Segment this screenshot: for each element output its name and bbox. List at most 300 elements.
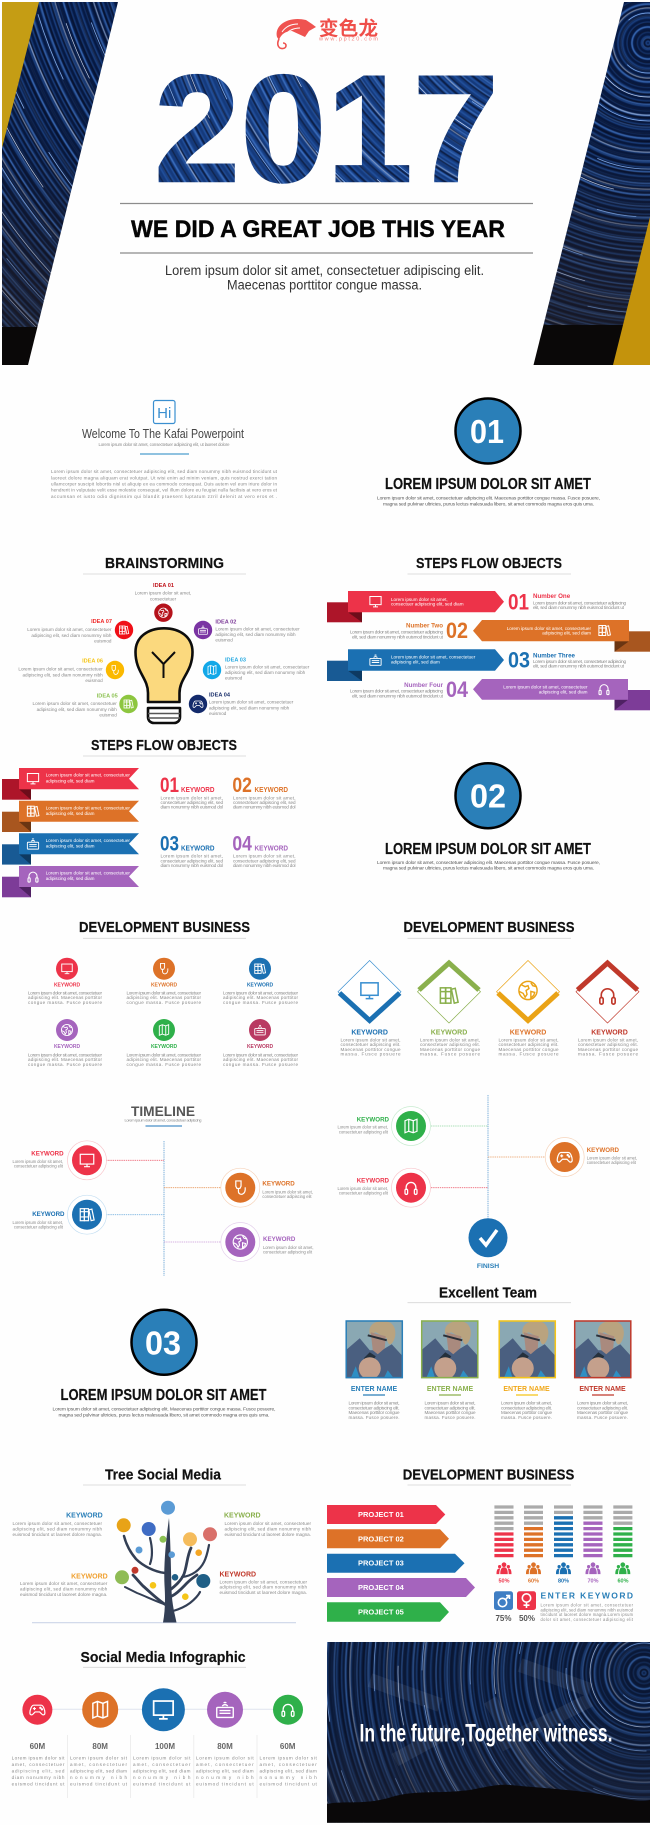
member yellow: ENTER NAME [503,1386,550,1393]
member yellow: consectetuer adipiscing elit. [501,1405,552,1410]
node red [12,1141,164,1180]
diamond green: consectetuer adipiscing elit. [420,1042,480,1047]
column 80M keyboard: euismod tincidunt ut [196,1781,254,1786]
item blue: KEYWORD [247,982,273,988]
step 02: 02 [446,618,468,643]
ribbon blue [2,833,139,865]
left gold corner [2,2,39,148]
bar chart: 80 percent: 80% [558,1578,569,1584]
section 02 description [377,860,600,872]
keyword red [220,1572,307,1595]
diamond amber: KEYWORD [510,1030,546,1037]
ribbon red: adipiscing elit, sed diam [46,778,95,783]
step 03: Lorem ipsum dolor sit amet, consectetuer adipiscing [533,659,626,664]
idea 01: IDEA 01 [153,583,174,589]
step 02: adipiscing elit, sed diam [542,631,591,636]
step 01: elit, sed diam nonummy nibh euismod tincidunt ut [533,605,625,610]
item red: congue massa. Fusce posuere [28,1000,102,1005]
node green: consectetuer adipiscing elit [339,1129,389,1134]
enter keyword block: adipiscing elit, sed diam nonummy nibh euismod [540,1607,634,1612]
keyword 01: KEYWORD [181,787,214,794]
panel: development business (six icons) [28,919,298,1067]
step 03: Lorem ipsum dolor sit amet, consectetuer [391,655,476,660]
node orange [164,1168,313,1207]
column 80M keyboard [196,1692,254,1786]
member blue: massa. Fusce posuere. [348,1415,400,1420]
node green: Lorem ipsum dolor sit amet, [337,1125,388,1130]
node purple [164,1222,314,1262]
item purple: KEYWORD [54,1044,80,1050]
idea 01 [135,583,191,622]
keyword blue: euismod tincidunt ut laoreet dolore magna. [12,1532,102,1537]
big year 2017: 2017 [154,44,499,214]
column 80M keyboard: Lorem ipsum dolor sit [196,1756,254,1761]
idea 02: IDEA 02 [215,619,236,625]
panel: welcome [51,400,278,499]
member yellow [499,1320,556,1420]
idea 02 [194,619,300,643]
item crimson: congue massa. Fusce posuere [223,1062,298,1067]
idea 04: euismod [209,711,227,716]
column 60M headphones [260,1695,318,1786]
node orange: KEYWORD [262,1180,295,1188]
hero subtitle: Lorem ipsum dolor sit amet, consectetuer adipiscing elit. [165,263,484,278]
item red: KEYWORD [54,982,80,988]
item crimson: Lorem ipsum dolor sit amet, consectetuer [223,1052,298,1057]
keyword 04: diam nonummy nibh euismod dol [233,863,296,868]
member red: Lorem ipsum dolor sit amet, [577,1400,628,1405]
item crimson [223,1019,298,1067]
keyword green: Lorem ipsum dolor sit amet, consectetuer [224,1521,311,1526]
bar chart: 60 percent orange: 60% [528,1578,539,1584]
idea 05: euismod [99,713,117,718]
idea 04: adipiscing elit, sed diam nonummy nibh [209,706,290,710]
item red: adipiscing elit. Maecenas porttitor [28,995,102,1000]
column 60M game: euismod tincidunt ut [12,1781,65,1786]
idea 06: IDEA 06 [82,659,103,665]
member yellow: massa. Fusce posuere. [501,1415,552,1420]
project 02: PROJECT 02 [358,1534,404,1543]
node blue: consectetuer adipiscing elit [14,1225,64,1230]
diamond blue: Maecenas porttitor congue [340,1047,401,1052]
column 60M headphones: euismod tincidunt ut [260,1781,318,1786]
section 01 description: magna sed pulvinar ultricies, purus lectus malesuada libero, sit amet commodo magna eros quis urna. [383,501,594,507]
keyword 01 [160,774,223,810]
keyword red: Lorem ipsum dolor sit amet, consectetuer [220,1579,307,1584]
diamond red: consectetuer adipiscing elit. [578,1042,638,1047]
idea 02: adipiscing elit, sed diam nonummy nibh [215,632,296,637]
member blue: Maecenas porttitor congue [348,1410,400,1415]
keyword 01: Lorem ipsum dolor sit amet, [160,795,223,800]
diamond amber [496,960,560,1057]
heading: Tree Social Media [105,1466,222,1483]
diamond blue: Lorem ipsum dolor sit amet, [340,1037,400,1042]
member red: Maecenas porttitor congue [577,1410,628,1415]
section 02 heading: LOREM IPSUM DOLOR SIT AMET [385,841,591,858]
hero subtitle [165,263,484,292]
panel: tree social media [12,1466,311,1623]
item green: Lorem ipsum dolor sit amet, consectetuer [126,1052,201,1057]
ribbon orange [2,801,139,832]
panel: closing star-trail slide [327,1642,650,1823]
enter keyword block: ENTER KEYWORD [540,1590,633,1600]
keyword green: KEYWORD [224,1513,261,1520]
step 03: 03 [508,648,530,673]
section 02 description: Lorem ipsum dolor sit amet, consectetuer adipiscing elit. Maecenas porttitor congue massa. Fusce posuere, [377,860,600,866]
diamond amber: consectetuer adipiscing elit. [498,1042,558,1047]
idea 03: euismod [225,676,243,681]
keyword blue: Lorem ipsum dolor sit amet, consectetuer [12,1521,102,1526]
column 100M monitor: adipiscing elit, sed diam [133,1768,191,1773]
item red [28,958,102,1005]
idea 05 [33,693,138,718]
panel: brainstorming [18,555,310,723]
keyword orange: KEYWORD [71,1573,108,1580]
column 60M game [12,1695,65,1786]
step 01: Lorem ipsum dolor sit amet, [391,597,448,602]
keyword orange: adipiscing elit, sed diam nonummy nibh [20,1586,108,1591]
step 04: elit, sed diam nonummy nibh euismod tincidunt ut [352,693,444,698]
diamond red: Maecenas porttitor congue [578,1047,638,1052]
idea 07: Lorem ipsum dolor sit amet, consectetuer [27,627,112,632]
column 100M monitor [133,1688,191,1786]
welcome heading: Welcome To The Kafai Powerpoint [82,427,244,441]
keyword blue [12,1513,103,1537]
keyword 01: diam nonummy nibh euismod dol [160,805,223,810]
welcome paragraph: ullamcorper suscipit lobortis nisl ut aliquip ex ea commodo consequat. Duis autem vel eum iriure dolor in [51,482,277,486]
bar chart: 80 percent [554,1507,573,1584]
bar chart: 50 percent: 50% [498,1578,510,1584]
panel: steps flow objects (arrows) [327,555,650,710]
hero subtitle: Maecenas porttitor congue massa. [227,278,422,292]
project 02 [327,1529,449,1548]
icon: Hi badge [154,400,175,424]
heading: Excellent Team [439,1284,537,1301]
idea 01: Lorem ipsum dolor sit amet, [135,590,191,596]
step 03 [327,648,626,681]
member green: ENTER NAME [427,1386,473,1393]
item purple: Lorem ipsum dolor sit amet, consectetuer [28,1052,102,1057]
section 01 description: Lorem ipsum dolor sit amet, consectetuer adipiscing elit. Maecenas porttitor congue massa. Fusce posuere, [377,496,600,502]
member yellow: Maecenas porttitor congue [501,1410,552,1415]
step 04: 04 [446,677,469,702]
idea 01: consectetuer [150,596,177,602]
keyword 04: Lorem ipsum dolor sit amet, [233,854,296,859]
panel: hero cover [2,2,650,365]
bar chart: 60 percent green [613,1507,632,1584]
step 04: Lorem ipsum dolor sit amet, consectetuer adipiscing [350,689,443,694]
panel: development business (diamonds) [338,919,639,1057]
idea 05: adipiscing elit, sed diam nonummy nibh [37,707,117,712]
diamond amber: Maecenas porttitor congue [498,1047,559,1052]
idea 04 [189,692,294,716]
column 80M map: nonummy nibh [70,1775,127,1780]
idea 03: IDEA 03 [225,657,246,663]
column 100M monitor: Lorem ipsum dolor sit [133,1756,191,1761]
panel: development business (projects) [327,1466,634,1623]
idea 05: Lorem ipsum dolor sit amet, consectetuer [33,701,117,706]
panel: timeline right [337,1095,637,1270]
project 01: PROJECT 01 [358,1510,404,1519]
step 01: 01 [508,589,529,614]
bar chart: 60 percent green: 60% [617,1578,629,1584]
keyword 01: consectetuer adipiscing elit, sed [160,800,223,805]
left star-trail slanted photo [2,2,118,365]
logo: chameleon brand: www.ppt20.com [318,36,378,42]
idea 07 [27,619,133,644]
item crimson: KEYWORD [247,1044,273,1050]
column 80M map [70,1692,128,1786]
heading: Social Media Infographic [80,1649,246,1666]
column 60M game: 60M [30,1742,46,1751]
keyword 02: diam nonummy nibh euismod dol [233,805,296,810]
column 100M monitor: euismod tincidunt ut [133,1781,191,1786]
ground line [32,1622,296,1624]
diamond blue: KEYWORD [351,1030,388,1037]
member red: massa. Fusce posuere. [577,1415,628,1420]
heading: BRAINSTORMING [105,555,224,572]
node blue [12,1195,164,1234]
column 80M keyboard: 80M [217,1742,233,1751]
enter keyword block: dolor sit amet, consectetuer adipiscing elit [540,1617,634,1622]
ribbon purple [2,866,139,897]
item blue [223,958,298,1005]
node crimson: consectetuer adipiscing elit [339,1191,389,1196]
column 100M monitor: 100M [155,1742,175,1751]
item green [126,1019,201,1067]
step 04: Number Four [404,682,444,689]
diamond red: KEYWORD [591,1030,628,1037]
node crimson: KEYWORD [357,1178,390,1184]
step 03: adipiscing elit, sed diam [391,659,440,664]
keyword 03: KEYWORD [181,845,214,852]
keyword 04 [232,832,296,868]
idea 03: adipiscing elit, sed diam nonummy nibh [225,670,306,675]
section 03 description: Lorem ipsum dolor sit amet, consectetuer adipiscing elit. Maecenas porttitor congue massa. Fusce posuere, [52,1407,276,1413]
number badge 03 [132,1310,196,1375]
keyword 04: 04 [232,832,252,855]
section 01 description [377,496,600,507]
idea 06: Lorem ipsum dolor sit amet, consectetuer [18,667,103,672]
step 01: Lorem ipsum dolor sit amet, consectetuer adipiscing [533,600,626,605]
enter keyword block: Lorem ipsum dolor sit amet, consectetuer [540,1603,634,1608]
ribbon purple: adipiscing elit, sed diam [46,876,95,881]
ribbon orange: adipiscing elit, sed diam [46,811,95,816]
diamond amber: Lorem ipsum dolor sit amet, [498,1037,558,1042]
member red [574,1320,631,1420]
logo: chameleon brand: 变色龙 [319,17,378,40]
node green: KEYWORD [357,1116,390,1124]
number badge 02 [456,763,520,828]
member green: consectetuer adipiscing elit. [424,1405,476,1410]
heading: DEVELOPMENT BUSINESS [404,919,574,936]
column 100M monitor: amet, consectetuer [133,1762,191,1767]
hero heading rules [120,204,533,253]
member green: massa. Fusce posuere. [424,1415,476,1420]
item purple [28,1019,102,1067]
column 60M headphones: 60M [280,1742,296,1751]
column 60M headphones: Lorem ipsum dolor sit [260,1756,318,1761]
keyword 01: 01 [160,774,179,797]
diamond blue [338,960,401,1057]
idea 03 [203,657,310,681]
step 03: elit, sed diam nonummy nibh euismod tincidunt ut [533,664,625,669]
icon: male share: 75% [495,1614,512,1623]
panel: social media infographic [12,1649,318,1798]
step 01: consectuer adipiscing elit, sed diam [391,602,464,607]
welcome sub line: Lorem ipsum dolor sit amet, consectetuer adipiscing elit, ut laoreet dolore [98,442,230,447]
item purple: congue massa. Fusce posuere [28,1062,102,1067]
project 03: PROJECT 03 [358,1559,404,1568]
hill silhouette [327,1785,650,1823]
ribbon purple: Lorem ipsum dolor sit amet, consectetuer [46,870,130,876]
finish node [468,1218,508,1270]
ribbon blue: Lorem ipsum dolor sit amet, consectetuer [46,838,130,843]
node red: Lorem ipsum dolor sit amet, [12,1159,63,1164]
welcome paragraph: hendrerit in vulputate velit esse molestie consequat, vel illum dolore eu feugiat nulla facilisis at vero eros et [51,488,278,492]
welcome paragraph: laoreet dolore magna aliquam erat volutpat. Ut wisi enim ad minim veniam, quis nostrud exerci tation [51,476,277,480]
idea 06 [18,659,124,683]
keyword blue: adipiscing elit, sed diam nonummy nibh [12,1526,102,1531]
keyword 02: KEYWORD [254,787,288,794]
finish node: FINISH [477,1263,499,1270]
right gold corner [613,217,650,365]
item green: adipiscing elit. Maecenas porttitor [126,1057,201,1062]
column 80M keyboard: amet, consectetuer [196,1762,254,1767]
node purple: KEYWORD [263,1236,296,1243]
item orange [126,958,201,1005]
heading: DEVELOPMENT BUSINESS [403,1466,574,1483]
idea 07: IDEA 07 [91,619,112,625]
keyword blue: KEYWORD [66,1513,103,1520]
member blue: Lorem ipsum dolor sit amet, [348,1400,400,1405]
step 02: Lorem ipsum dolor sit amet, consectetuer adipiscing [350,630,443,635]
section 03 heading: LOREM IPSUM DOLOR SIT AMET [60,1387,267,1404]
keyword green: euismod tincidunt ut laoreet dolore magna. [224,1532,311,1537]
idea 07: adipiscing elit, sed diam nonummy nibh [31,633,112,638]
member green [421,1320,478,1420]
welcome paragraph [51,469,278,499]
keyword 04: consectetuer adipiscing elit, sed [233,858,296,863]
column 60M game: diam nonummy nibh [12,1775,65,1780]
icon: male share [494,1591,513,1623]
step 02: Number Two [406,623,443,630]
member red: consectetuer adipiscing elit. [577,1405,628,1410]
section 01 heading: LOREM IPSUM DOLOR SIT AMET [385,476,591,493]
keyword 03 [160,832,223,868]
ribbon blue: adipiscing elit, sed diam [46,844,95,849]
column 80M map: amet, consectetuer [70,1762,127,1767]
keyword 04: KEYWORD [254,845,288,852]
column 60M headphones: amet, consectetuer [260,1762,317,1767]
bar chart: 70 percent [583,1507,602,1584]
keyword 02 [232,774,296,810]
keyword orange [20,1573,108,1597]
keyword 03: Lorem ipsum dolor sit amet, [160,854,223,859]
keyword red: adipiscing elit, sed diam nonummy nibh [220,1585,307,1590]
diamond green: massa. Fusce posuere [420,1052,480,1057]
node orange: KEYWORD [587,1147,620,1154]
diamond red: Lorem ipsum dolor sit amet, [578,1037,638,1042]
column 80M map: euismod tincidunt ut [70,1781,128,1786]
heading: DEVELOPMENT BUSINESS [79,919,250,936]
icon: tree [115,1501,217,1622]
diamond blue: massa. Fusce posuere [340,1052,401,1057]
bar chart: 70 percent: 70% [587,1578,599,1584]
section 03 description: magna sed pulvinar ultricies, purus lectus malesuada libero, sit amet commodo magna eros quis urna. [58,1412,270,1418]
node purple: Lorem ipsum dolor sit amet, [263,1245,314,1250]
diamond green: KEYWORD [431,1030,467,1037]
number badge 01: 01 [470,413,504,450]
idea 02: Lorem ipsum dolor sit amet, consectetuer [215,626,300,632]
column 60M headphones: nonummy nibh [260,1775,317,1780]
number badge 03: 03 [145,1324,181,1361]
step 01 [327,589,626,622]
panel: section 01 [377,398,600,507]
diamond green: Lorem ipsum dolor sit amet, [420,1037,480,1042]
node blue: KEYWORD [32,1211,65,1218]
ribbon orange: Lorem ipsum dolor sit amet, consectetuer [46,805,130,810]
column 80M map: adipiscing elit, sed diam [70,1768,127,1773]
item orange: congue massa. Fusce posuere [126,1000,201,1005]
section 02 description: magna sed pulvinar ultricies, purus lectus malesuada libero, sit amet commodo magna eros quis urna. [383,866,594,872]
step 04 [350,677,650,710]
keyword green [224,1513,311,1537]
column 80M keyboard: nonummy nibh [196,1775,254,1780]
node crimson: Lorem ipsum dolor sit amet, [337,1186,388,1191]
panel: timeline left [12,1103,314,1276]
member green: Maecenas porttitor congue [424,1410,476,1415]
node orange: Lorem ipsum dolor sit amet, [587,1155,637,1160]
column 80M keyboard: adipiscing elit, sed diam [196,1768,254,1773]
node blue: Lorem ipsum dolor sit amet, [12,1220,63,1225]
member red: ENTER NAME [579,1386,626,1393]
project 01 [327,1505,445,1524]
member blue: ENTER NAME [351,1386,397,1393]
step 01: Number One [533,593,571,600]
bar chart: 60 percent orange [524,1507,543,1584]
diamond blue: consectetuer adipiscing elit. [340,1042,400,1047]
number badge 02: 02 [470,778,506,815]
node red: KEYWORD [31,1150,64,1158]
keyword 03: 03 [160,832,179,855]
step 02: elit, sed diam nonummy nibh euismod tincidunt ut [352,634,444,639]
node orange: Lorem ipsum dolor sit amet, [262,1189,313,1194]
keyword green: adipiscing elit, sed diam nonummy nibh [224,1526,311,1531]
diamond green: Maecenas porttitor congue [420,1047,480,1052]
item orange: adipiscing elit. Maecenas porttitor [126,995,201,1000]
icon: female share: 50% [519,1614,535,1623]
node crimson [337,1168,488,1207]
diamond amber: massa. Fusce posuere [498,1052,559,1057]
keyword red: euismod tincidunt ut laoreet dolore magna. [220,1590,307,1595]
section 03 description [52,1407,276,1418]
keyword orange: Lorem ipsum dolor sit amet, consectetuer [20,1581,108,1586]
item orange: Lorem ipsum dolor sit amet, consectetuer [126,990,201,995]
member blue [346,1320,403,1420]
item blue: adipiscing elit. Maecenas porttitor [223,995,298,1000]
item blue: congue massa. Fusce posuere [223,1000,298,1005]
hero heading: WE DID A GREAT JOB THIS YEAR [131,216,505,243]
member yellow: Lorem ipsum dolor sit amet, [501,1400,552,1405]
member green: Lorem ipsum dolor sit amet, [424,1400,476,1405]
item orange: KEYWORD [151,982,177,988]
welcome paragraph: Lorem ipsum dolor sit amet, consectetuer adipiscing elit, sed diam nonummy nibh euismod tincidunt ut [51,469,278,474]
keyword 03: diam nonummy nibh euismod dol [160,863,223,868]
project 05: PROJECT 05 [358,1608,404,1616]
item red: Lorem ipsum dolor sit amet, consectetuer [28,990,102,995]
project 04: PROJECT 04 [358,1583,405,1592]
